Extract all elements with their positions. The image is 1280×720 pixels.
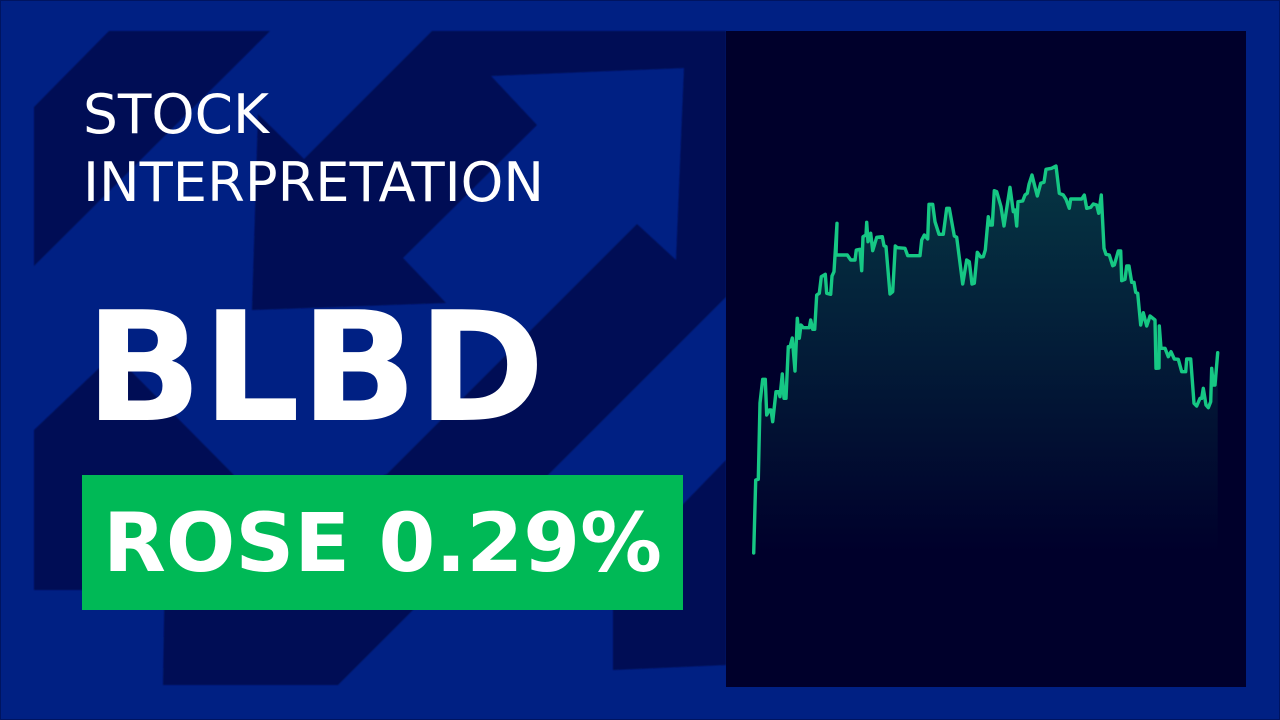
chart panel xyxy=(726,31,1246,687)
background arrow shapes xyxy=(34,31,726,685)
badge background xyxy=(82,475,683,610)
title: STOCK xyxy=(83,83,271,146)
panel background xyxy=(726,31,1246,687)
title xyxy=(83,83,544,214)
title: INTERPRETATION xyxy=(83,151,544,214)
ticker symbol: BLBD xyxy=(85,279,545,456)
change badge xyxy=(82,475,683,610)
area under price line xyxy=(754,166,1218,553)
price line xyxy=(754,166,1218,553)
badge text: ROSE 0.29% xyxy=(103,497,662,591)
